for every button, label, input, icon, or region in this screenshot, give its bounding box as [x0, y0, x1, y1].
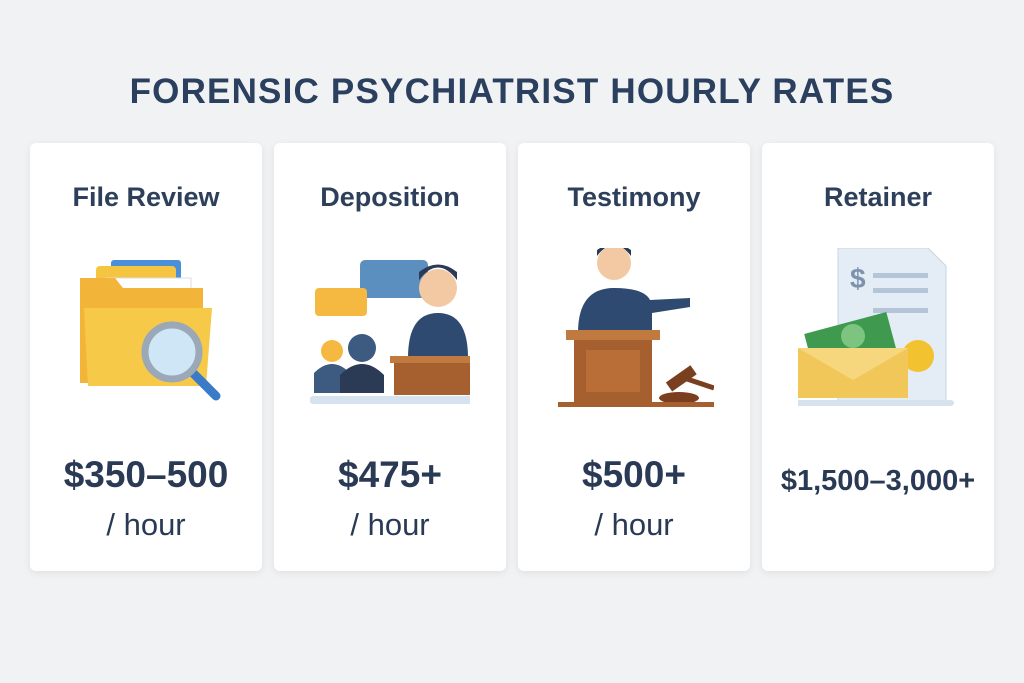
icon: deposition scene	[310, 260, 470, 404]
heading: deposition: Deposition	[320, 182, 460, 212]
panel: testimony	[518, 143, 750, 571]
price: deposition: $475+	[338, 454, 442, 495]
unit: file review: / hour	[106, 507, 186, 542]
icon: witness at podium	[558, 248, 714, 407]
heading: testimony: Testimony	[567, 182, 701, 212]
price: file review: $350–500	[64, 454, 228, 495]
title: FORENSIC PSYCHIATRIST HOURLY RATES	[130, 72, 894, 111]
heading: retainer: Retainer	[824, 182, 932, 212]
icon: invoice with money envelope	[798, 248, 954, 406]
unit: testimony: / hour	[594, 507, 674, 542]
heading: file review: File Review	[72, 182, 220, 212]
price: retainer: $1,500–3,000+	[781, 465, 975, 497]
price: testimony: $500+	[582, 454, 686, 495]
panel: retainer	[762, 143, 994, 571]
unit: deposition: / hour	[350, 507, 430, 542]
icon: invoice with money envelope: $	[850, 263, 866, 294]
panel: file review	[30, 143, 262, 571]
panel: deposition	[274, 143, 506, 571]
icon: folder with magnifier	[80, 260, 220, 400]
